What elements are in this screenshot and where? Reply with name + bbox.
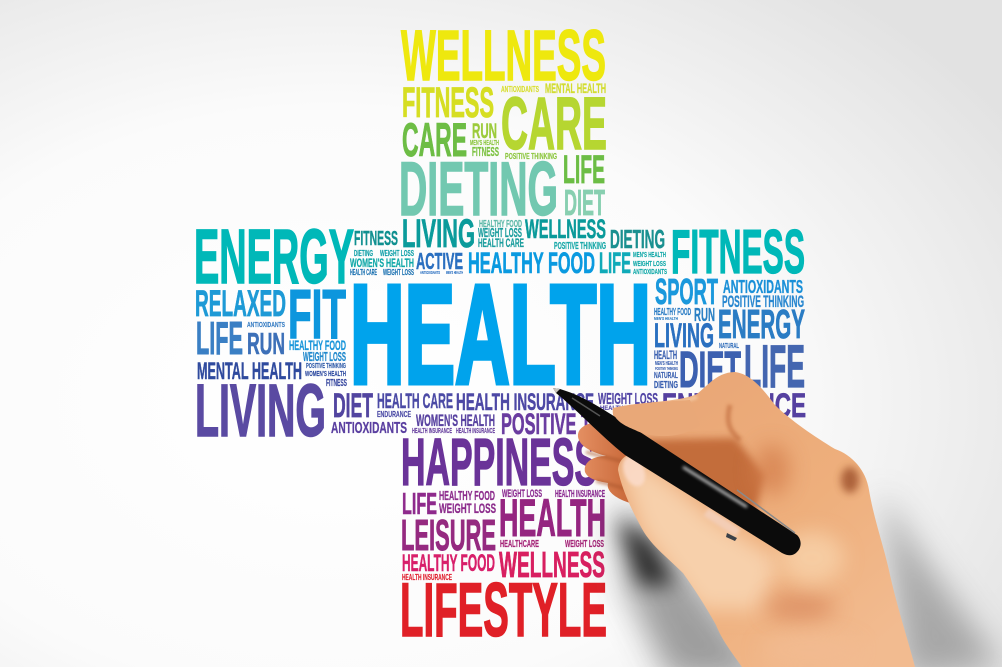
panel: left arm of cross: POSITIVE THINKING bbox=[306, 363, 346, 370]
panel: left arm of cross: WEIGHT LOSS bbox=[380, 248, 414, 258]
panel: right arm of cross: HEALTH bbox=[654, 350, 677, 362]
text: LIFE bbox=[744, 333, 805, 400]
panel: top arm of cross: WEIGHT LOSS bbox=[478, 225, 522, 240]
panel: top arm of cross: HEALTH CARE bbox=[478, 236, 524, 250]
panel: right arm of cross: ANTIOXIDANTS bbox=[633, 267, 667, 276]
panel: left arm of cross: WEIGHT LOSS bbox=[303, 349, 346, 364]
small gap between thumb and palm bbox=[726, 533, 737, 541]
panel: right arm of cross: NATURAL bbox=[654, 370, 678, 380]
panel: lower centre row: ENDURANCE bbox=[377, 409, 411, 419]
panel: centre row of cross: ANTIOXIDANTS bbox=[420, 270, 440, 275]
word: LIFE magenta: LIFE bbox=[402, 486, 437, 521]
panel: left arm of cross: ENERGY bbox=[194, 214, 354, 300]
word: SPORT: SPORT bbox=[655, 271, 718, 312]
finger shadow between index and pen bbox=[640, 438, 765, 515]
word: HEALTHY FOOD: HEALTHY FOOD bbox=[468, 247, 595, 280]
word: WELLNESS: WELLNESS bbox=[401, 17, 606, 96]
panel: top arm of cross: FITNESS bbox=[472, 144, 499, 159]
icon: hand holding pen bbox=[553, 360, 930, 667]
word: DIETING teal: DIETING bbox=[610, 224, 665, 254]
word: FITNESS: FITNESS bbox=[402, 79, 494, 127]
word: LIVING: LIVING bbox=[402, 212, 475, 256]
index fingertip over pen bbox=[613, 400, 700, 436]
panel: bottom arm of cross: HEALTH INSURANCE bbox=[555, 489, 605, 500]
word: DIET: DIET bbox=[333, 387, 373, 425]
panel: bottom arm of cross: LEISURE bbox=[401, 511, 496, 560]
panel: lower centre row: HEALTH INSURANCE bbox=[412, 428, 452, 435]
panel: top arm of cross: LIFE bbox=[563, 148, 605, 192]
panel: bottom arm of cross bbox=[400, 425, 607, 653]
word: POSITIVE: POSITIVE T bbox=[501, 408, 591, 441]
panel: bottom arm of cross: WEIGHT LOSS bbox=[565, 539, 604, 550]
word: HAPPINESS: HAPPINESS bbox=[401, 425, 597, 500]
panel: top arm of cross: MEN'S HEALTH bbox=[470, 140, 499, 147]
panel: bottom arm of cross: WEIGHT LOSS bbox=[502, 488, 542, 500]
panel: right arm of cross: MEN'S HEALTH bbox=[655, 361, 678, 367]
panel: top arm of cross: ANTIOXIDANTS bbox=[501, 84, 539, 94]
word: DIET blue: DIET bbox=[679, 341, 741, 398]
word: ACTIVE: ACTIVE bbox=[416, 248, 463, 274]
word: HEALTH CARE: HEALTH CARE bbox=[377, 390, 453, 413]
panel: left arm of cross: ANTIOXIDANTS bbox=[247, 320, 285, 329]
panel: right arm of cross: WEIGHT LOSS bbox=[633, 259, 666, 268]
panel: top arm of cross bbox=[399, 17, 607, 256]
panel: right arm of cross: POSITIVE THINKING bbox=[655, 366, 678, 371]
panel: left arm of cross: WOMEN'S HEALTH bbox=[305, 371, 346, 378]
word: WELLNESS pink: WELLNESS bbox=[499, 544, 605, 585]
knuckle and creases bbox=[841, 467, 859, 493]
panel: top arm of cross: POSITIVE THINKING bbox=[554, 241, 606, 252]
panel: top arm of cross: MENTAL HEALTH bbox=[545, 80, 606, 96]
word: LIVING purple: LIVING bbox=[195, 369, 326, 452]
panel: lower centre row bbox=[331, 387, 658, 441]
panel: right arm of cross: MEN'S HEALTH bbox=[654, 316, 678, 321]
panel: left arm of cross: LIFE bbox=[196, 312, 243, 364]
panel: top arm of cross: CARE bbox=[402, 113, 467, 166]
panel: left arm of cross: HEALTHY FOOD bbox=[289, 337, 346, 353]
panel: right arm of cross: MEN'S HEALTH bbox=[633, 250, 666, 259]
word: CARE large: CARE bbox=[501, 82, 607, 165]
word: RUN: RUN bbox=[247, 326, 285, 361]
word: RELAXED: RELAXED bbox=[195, 283, 286, 324]
word: FITNESS large: FITNESS bbox=[671, 218, 805, 287]
word: LIFESTYLE: LIFESTYLE bbox=[400, 568, 607, 653]
panel: right arm of cross: NATURAL bbox=[719, 343, 739, 350]
back fingers bbox=[578, 421, 680, 503]
hand shadow bbox=[612, 490, 1002, 667]
thumb shading bbox=[618, 460, 780, 610]
word: HEALTH magenta: HEALTH bbox=[499, 489, 606, 548]
word cloud: cross shape bbox=[194, 17, 806, 653]
panel: right arm of cross: DIETING bbox=[654, 380, 678, 391]
panel: right arm of cross: ANTIOXIDANTS bbox=[723, 276, 803, 297]
panel: lower centre row: HEALTHCARE bbox=[600, 406, 640, 412]
panel: top arm of cross: RUN bbox=[472, 120, 497, 143]
word: DIETING: DIETING bbox=[399, 147, 558, 232]
panel: lower centre row: WEIGHT LOSS bbox=[598, 391, 658, 408]
panel: top arm of cross: POSITIVE THINKING bbox=[505, 151, 557, 161]
panel: centre row of cross: MEN'S HEALTH bbox=[446, 270, 463, 275]
panel: bottom arm of cross: HEALTHCARE bbox=[500, 539, 539, 550]
word: WOMEN'S HEALTH: WOMEN'S HEALTH bbox=[416, 411, 495, 430]
panel: top arm of cross: DIET bbox=[564, 182, 605, 223]
panel: left arm of cross: WOMEN'S HEALTH bbox=[350, 258, 414, 270]
panel: right arm of cross bbox=[610, 218, 806, 425]
word: FIT: FIT bbox=[288, 275, 346, 353]
panel: right arm of cross: RUN bbox=[694, 304, 715, 325]
panel: bottom arm of cross: WEIGHT LOSS bbox=[439, 500, 496, 516]
panel: left arm of cross: DIETING bbox=[354, 248, 373, 258]
panel: left arm of cross: FITNESS bbox=[326, 378, 347, 389]
panel: bottom arm of cross: HEALTHY FOOD bbox=[439, 488, 495, 503]
panel: left arm of cross: WEIGHT LOSS bbox=[383, 267, 414, 277]
word: HEALTH main title: HEALTH bbox=[350, 255, 651, 413]
word: ANTIOXIDANTS: ANTIOXIDANTS bbox=[331, 420, 407, 437]
panel: centre row of cross: LIFE bbox=[599, 247, 631, 280]
word: WELLNESS teal: WELLNESS bbox=[525, 214, 606, 244]
word: ENERGY blue: ENERGY bbox=[718, 301, 805, 347]
word: LIVING blue: LIVING bbox=[654, 317, 714, 355]
panel: left arm of cross bbox=[194, 214, 414, 452]
word: MENTAL HEALTH: MENTAL HEALTH bbox=[197, 358, 302, 385]
panel: centre row of cross bbox=[350, 247, 651, 413]
word: ENDURANCE: ENDURANCE bbox=[662, 387, 806, 425]
word: HEALTH INSURANCE: HEALTH INSURANCE bbox=[456, 389, 594, 416]
panel: left arm of cross: HEALTH CARE bbox=[350, 267, 377, 277]
panel: left arm of cross: FITNESS bbox=[354, 228, 398, 250]
panel: top arm of cross: HEALTHY FOOD bbox=[479, 219, 522, 230]
panel: bottom arm of cross: HEALTH INSURANCE bbox=[402, 572, 452, 582]
pen bbox=[553, 388, 801, 555]
panel: bottom arm of cross: HEALTHY FOOD bbox=[402, 550, 495, 577]
panel: right arm of cross: HEALTHY FOOD bbox=[654, 307, 691, 318]
panel: right arm of cross: POSITIVE THINKING bbox=[722, 292, 804, 311]
panel: lower centre row: HEALTH INSURANCE bbox=[456, 428, 495, 435]
back of hand and thumb silhouette bbox=[612, 372, 915, 667]
